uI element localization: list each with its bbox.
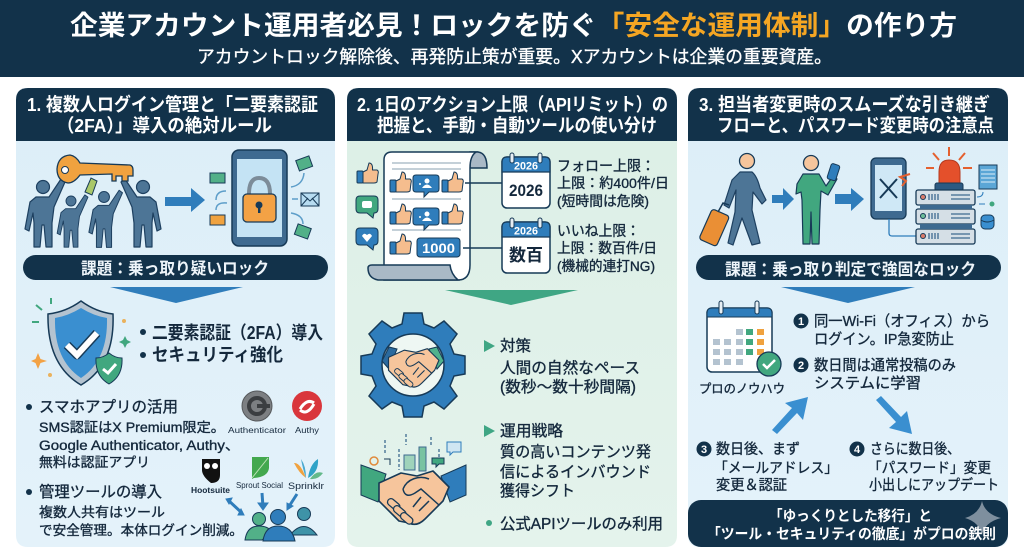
text: countermeasure (484, 337, 640, 396)
icon: alarm siren on servers (900, 147, 975, 244)
icon: team with tool arrows (226, 493, 317, 541)
text: countermeasure: 人間の自然なペース (500, 359, 640, 377)
step 4: さらに数日後、 (870, 441, 960, 458)
panel: 2FA login management (16, 88, 335, 547)
step 2: 2 (798, 360, 804, 372)
step 4: 小出しにアップデート (869, 476, 999, 494)
text: like limit (557, 223, 657, 274)
icon: reaction bubbles (356, 163, 378, 250)
calendar: follow limit: 2026 (514, 160, 538, 172)
text: management tools (26, 483, 243, 538)
challenge pill (696, 255, 1001, 280)
icon: gear with handshake (361, 313, 465, 417)
caption: pro know-how: プロのノウハウ (699, 382, 785, 396)
text: 2FA bullets (140, 323, 323, 365)
step 3: 「メールアドレス」 (714, 460, 838, 477)
arrow: down (110, 287, 243, 303)
text: countermeasure: 対策 (500, 337, 531, 355)
arrow: successor to account (835, 188, 864, 211)
step 3: 変更＆認証 (716, 477, 787, 494)
icon: Authy: Authy (295, 425, 320, 435)
panel 3 heading (688, 88, 1008, 141)
arrow: step 2 to step 4 (876, 396, 912, 434)
arrow: down (445, 290, 578, 305)
text: follow limit: (短時間は危険) (557, 193, 649, 209)
step 1: ログイン。IP急変防止 (814, 331, 954, 348)
step 4: 4 (854, 444, 861, 456)
icon: Authy (292, 391, 322, 435)
calendar: follow limit (502, 153, 550, 208)
text: operating strategy: 獲得シフト (500, 482, 575, 500)
callout: iron rule: 「ツール・セキュリティの徹底」がプロの鉄則 (707, 525, 996, 543)
icon: Hootsuite (191, 459, 230, 495)
text: operating strategy: 質の高いコンテンツ発 (500, 443, 651, 461)
panel: handover flow (688, 88, 1008, 547)
text: 2FA bullets: 二要素認証（2FA）導入 (152, 323, 323, 343)
text: official API tools only: 公式APIツールのみ利用 (500, 515, 663, 533)
panel 3 heading: 3. 担当者変更時のスムーズな引き継ぎ (699, 94, 990, 115)
challenge pill (23, 255, 328, 280)
text: management tools: 複数人共有はツール (39, 504, 165, 520)
step 1 (794, 313, 990, 348)
text: smartphone app (26, 398, 240, 470)
step 2: 数日間は通常投稿のみ (814, 357, 956, 374)
step 4 (850, 441, 999, 494)
icon: Sprout Social (236, 457, 283, 490)
text: smartphone app: スマホアプリの活用 (39, 398, 178, 416)
text: management tools: で安全管理。本体ログイン削減。 (39, 522, 243, 538)
panel 1 heading: （2FA）」導入の絶対ルール (57, 115, 272, 136)
icon: group holding shared key (25, 155, 161, 247)
calendar: like limit: 数百 (509, 246, 543, 265)
text: management tools: 管理ツールの導入 (39, 483, 162, 501)
step 3: 3 (701, 444, 707, 456)
panel 2 heading: 2. 1日のアクション上限（APIリミット）の (357, 94, 668, 115)
step 4: 「パスワード」変更 (868, 460, 991, 477)
step 2 (794, 357, 956, 392)
text: like limit: いいね上限： (557, 223, 640, 240)
text: 2FA bullets: セキュリティ強化 (152, 345, 283, 365)
text: follow limit: 上限：約400件/日 (557, 175, 669, 191)
text: like limit: 上限：数百件/日 (557, 240, 657, 256)
panel 2 heading: 把握と、手動・自動ツールの使い分け (377, 115, 657, 136)
challenge pill: 課題：乗っ取り疑いロック (81, 259, 269, 278)
icon: departing employee with suitcase (699, 154, 766, 247)
panel 2 heading (347, 88, 677, 141)
arrow: departing to successor (772, 188, 794, 210)
text: like limit: (機械的連打NG) (557, 258, 655, 274)
calendar: follow limit: 2026 (509, 181, 543, 200)
icon: successor with phone (796, 156, 840, 244)
arrow: people to locked phone (165, 188, 205, 212)
panel 3 heading: フローと、パスワード変更時の注意点 (717, 115, 994, 136)
text: follow limit (557, 158, 669, 209)
text: smartphone app: 無料は認証アプリ (39, 455, 150, 470)
text: smartphone app: Google Authenticator, Authy、 (39, 438, 240, 453)
step 3: 数日後、まず (716, 441, 800, 458)
icon: Hootsuite: Hootsuite (191, 485, 230, 495)
icon: Sprinklr (288, 459, 324, 492)
text: operating strategy (484, 422, 651, 500)
text: follow limit: フォロー上限： (557, 158, 655, 175)
icon: partnership handshake with chart (361, 434, 466, 526)
icon: document and database (977, 165, 997, 229)
step 3 (696, 441, 838, 494)
icon: Authenticator: Authenticator (228, 425, 286, 435)
text: operating strategy: 信によるインバウンド (500, 463, 651, 481)
arrow: down (781, 287, 915, 303)
step 1: 同一Wi-Fi（オフィス）から (814, 313, 990, 330)
arrow: step 3 to step 2 (772, 397, 808, 434)
challenge pill: 課題：乗っ取り判定で強固なロック (725, 260, 976, 279)
step 2: システムに学習 (814, 375, 921, 392)
step 1: 1 (798, 316, 804, 328)
text: smartphone app: SMS認証はX Premium限定。 (39, 420, 225, 435)
header banner (0, 0, 1024, 77)
icon: Authenticator (228, 391, 286, 435)
icon: security shield (31, 298, 131, 385)
callout: iron rule (688, 500, 1008, 547)
panel 1 heading (16, 88, 335, 141)
panel: API limits (347, 88, 677, 547)
title: 企業アカウント運用者必見！ロックを防ぐ 「安全な運用体制」の作り方 (70, 11, 957, 41)
icon: Sprout Social: Sprout Social (236, 481, 283, 490)
icon: scroll of actions (368, 152, 502, 280)
panel 1 heading: 1. 複数人ログイン管理と「二要素認証 (27, 94, 318, 115)
text: operating strategy: 運用戦略 (500, 422, 563, 440)
icon: X account smartphone (871, 158, 916, 236)
calendar: like limit: 2026 (514, 226, 538, 238)
icon: calendar know-how (707, 301, 781, 376)
icon: Sprinklr: Sprinklr (288, 481, 324, 492)
subtitle: アカウントロック解除後、再発防止策が重要。Xアカウントは企業の重要資産。 (197, 47, 832, 67)
calendar: like limit (502, 218, 550, 273)
icon: smartphone with padlock (210, 150, 319, 246)
icon: scroll of actions: 1000 (422, 241, 455, 256)
text: countermeasure: (数秒〜数十秒間隔) (500, 378, 636, 396)
callout: iron rule: 「ゆっくりとした移行」と (769, 508, 932, 525)
